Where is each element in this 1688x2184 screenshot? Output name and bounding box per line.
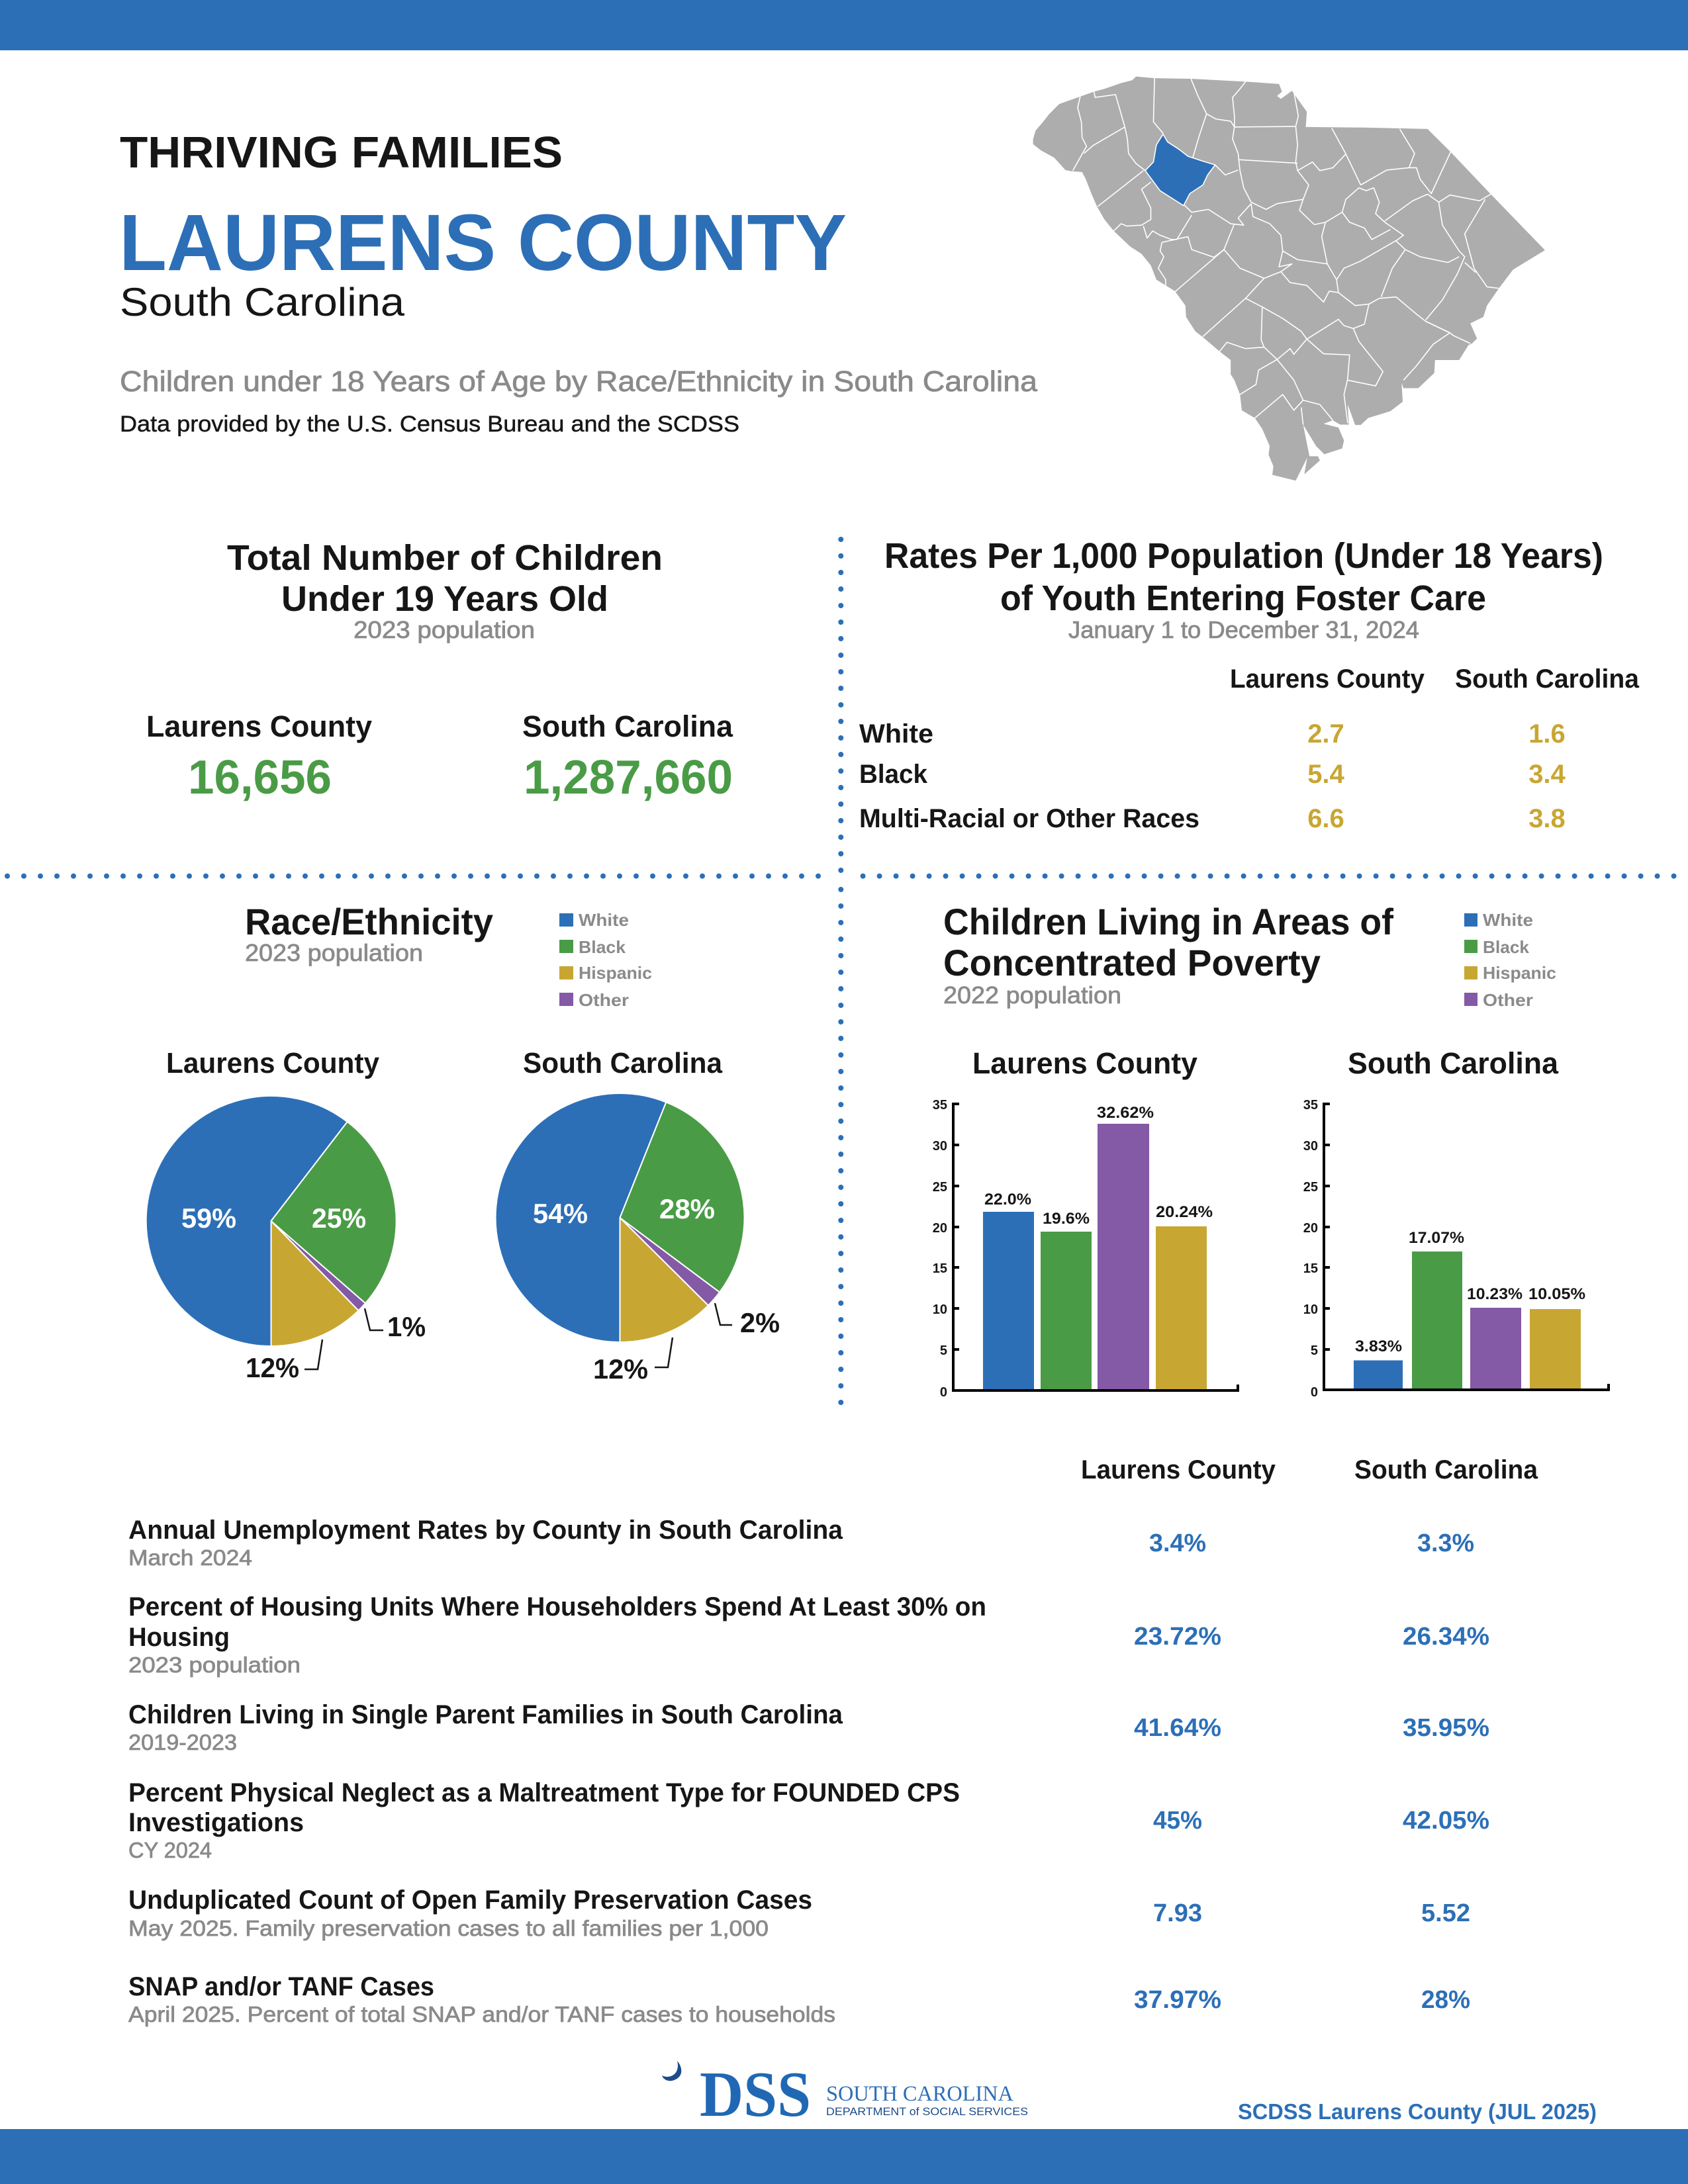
bar chart: South Carolina: 25 [1303, 1180, 1318, 1195]
row: SNAP and TANF [128, 1972, 1470, 2026]
column: Laurens County: Laurens County [1230, 664, 1425, 694]
pie labels: South Carolina: 2% [740, 1307, 780, 1338]
row: single parent families: 41.64% [1134, 1714, 1221, 1742]
values: 6.6 [1307, 804, 1344, 833]
pie chart: South Carolina [496, 1093, 744, 1342]
row: physical neglect [128, 1778, 1489, 1862]
bar chart: Laurens County: 35 [933, 1098, 947, 1113]
bar chart: Laurens County [933, 1098, 1238, 1400]
legend [1464, 910, 1556, 1010]
legend: Other [1483, 990, 1533, 1010]
values: 3.8 [1528, 804, 1566, 833]
row: housing: 2023 population [128, 1653, 301, 1677]
column: South Carolina: South Carolina [1354, 1455, 1538, 1484]
panel: total number of children [146, 538, 733, 804]
heading: Race/Ethnicity [245, 901, 493, 942]
bar chart: South Carolina: 10.05% [1528, 1285, 1585, 1303]
legend: Hispanic [1483, 963, 1556, 983]
subtitle: south carolina: South Carolina [120, 280, 405, 324]
row: unemployment: Annual Unemployment Rates by County in South Carolina [128, 1516, 843, 1545]
heading line 2: of Youth Entering Foster Care [1000, 578, 1486, 618]
bar chart: South Carolina: 10 [1303, 1302, 1318, 1317]
pie labels: South Carolina: 54% [533, 1198, 588, 1229]
bar chart: South Carolina: 35 [1303, 1098, 1318, 1113]
heading line 2: Under 19 Years Old [281, 579, 608, 619]
heading line 2: Concentrated Poverty [943, 942, 1321, 983]
row: SNAP and TANF: SNAP and/or TANF Cases [128, 1972, 434, 2001]
bar chart: Laurens County: 10 [933, 1302, 947, 1317]
bar chart: South Carolina: 10.23% [1467, 1285, 1523, 1303]
heading: Total Number of Children [227, 538, 663, 578]
row: single parent families [128, 1700, 1489, 1754]
row: unemployment: March 2024 [128, 1545, 252, 1570]
heading: Children Living in Areas of [943, 901, 1393, 942]
row: family preservation: 5.52 [1421, 1899, 1470, 1927]
bar chart: South Carolina: 3.83% [1355, 1338, 1402, 1355]
row: physical neglect: 45% [1153, 1807, 1202, 1835]
header block [119, 128, 1038, 437]
bar chart: South Carolina: 5 [1311, 1343, 1318, 1358]
row: unemployment [128, 1516, 1474, 1570]
subheading: 2023 population [353, 616, 535, 643]
row: SNAP and TANF: 37.97% [1134, 1986, 1221, 2014]
description: Children under 18 Years of Age by Race/Ethnicity in South Carolina [120, 365, 1038, 398]
row: family preservation: 7.93 [1153, 1899, 1202, 1927]
title: laurens county: LAURENS COUNTY [119, 197, 847, 287]
bar chart: Laurens County: 19.6% [1043, 1210, 1090, 1228]
column: Laurens County: Laurens County [1081, 1455, 1276, 1484]
pie labels: Laurens County: 59% [181, 1203, 236, 1234]
bar chart: Laurens County: 20.24% [1156, 1203, 1213, 1221]
divider dots [838, 539, 843, 872]
legend: Other [579, 990, 629, 1010]
row: physical neglect: Percent Physical Neglect as a Maltreatment Type for FOUNDED CPS [128, 1778, 960, 1807]
label: South Carolina: South Carolina [522, 709, 733, 743]
value: Laurens County children: 16,656 [188, 751, 332, 804]
value: South Carolina children: 1,287,660 [524, 751, 733, 804]
row: single parent families: 2019-2023 [128, 1730, 237, 1754]
legend [559, 910, 652, 1010]
title: thriving families: THRIVING FAMILIES [120, 128, 563, 177]
data source: Data provided by the U.S. Census Bureau and the SCDSS [120, 412, 739, 437]
map: south carolina counties with Laurens highlighted [1033, 77, 1545, 480]
label: South Carolina: South Carolina [1348, 1046, 1559, 1080]
bar chart: Laurens County: 15 [933, 1261, 947, 1276]
row: single parent families: Children Living in Single Parent Families in South Carolina [128, 1700, 843, 1729]
logo letters: DSS [700, 2059, 811, 2130]
pie labels: Laurens County: 12% [246, 1352, 299, 1383]
panel: foster care rates [859, 536, 1640, 833]
row: housing: Percent of Housing Units Where Householders Spend At Least 30% on [128, 1592, 986, 1621]
values: 1.6 [1528, 719, 1566, 749]
bar chart: Laurens County: 20 [933, 1221, 947, 1236]
bar chart: South Carolina: 30 [1303, 1139, 1318, 1154]
bar chart: Laurens County: 25 [933, 1180, 947, 1195]
pie chart: Laurens County [146, 1096, 397, 1346]
pie labels: South Carolina [533, 1193, 780, 1385]
label: Laurens County: Laurens County [972, 1046, 1197, 1080]
row: physical neglect: 42.05% [1403, 1807, 1489, 1835]
subheading: 2023 population [245, 939, 423, 966]
top banner [0, 0, 1688, 50]
footer credit: SCDSS Laurens County (JUL 2025) [1238, 2099, 1597, 2124]
bar chart: Laurens County: 32.62% [1097, 1104, 1154, 1122]
pie labels: Laurens County: 1% [387, 1311, 426, 1342]
bar chart: South Carolina: 15 [1303, 1261, 1318, 1276]
label: Laurens County: Laurens County [166, 1047, 380, 1079]
row: White: White [859, 719, 933, 749]
bar chart: Laurens County: 5 [940, 1343, 947, 1358]
logo: SC DSS [662, 2059, 1028, 2130]
row: physical neglect: CY 2024 [128, 1838, 212, 1862]
legend: White [579, 910, 629, 930]
row: unemployment: 3.3% [1417, 1529, 1474, 1557]
row: Multi-Racial: Multi-Racial or Other Races [859, 804, 1199, 833]
row: Black: Black [859, 760, 928, 789]
panel: indicators table [128, 1455, 1538, 2026]
pie labels: Laurens County [181, 1203, 426, 1383]
values: 3.4 [1528, 760, 1566, 789]
logo line 1: SOUTH CAROLINA [826, 2082, 1013, 2106]
row: SNAP and TANF: April 2025. Percent of total SNAP and/or TANF cases to households [128, 2002, 835, 2026]
bar chart: Laurens County: 0 [940, 1385, 947, 1400]
row: housing: 26.34% [1403, 1623, 1489, 1651]
bar chart: South Carolina: 0 [1311, 1385, 1318, 1400]
row: family preservation [128, 1886, 1470, 1940]
subheading: January 1 to December 31, 2024 [1068, 616, 1419, 643]
row: physical neglect: Investigations [128, 1808, 304, 1837]
label: South Carolina: South Carolina [523, 1047, 723, 1079]
row: housing [128, 1592, 1489, 1677]
column: South Carolina: South Carolina [1455, 664, 1640, 694]
label: Laurens County: Laurens County [146, 709, 372, 743]
logo line 2: DEPARTMENT of SOCIAL SERVICES [826, 2105, 1028, 2118]
pie labels: Laurens County: 25% [312, 1203, 366, 1234]
row: family preservation: May 2025. Family preservation cases to all families per 1,000 [128, 1916, 769, 1940]
values [1307, 719, 1566, 833]
panel: race/ethnicity [146, 901, 780, 1385]
row: family preservation: Unduplicated Count of Open Family Preservation Cases [128, 1886, 812, 1915]
icon: crescent moon [662, 2061, 681, 2081]
subheading: 2022 population [943, 981, 1121, 1009]
bar chart: Laurens County: 22.0% [984, 1191, 1031, 1208]
panel: concentrated poverty [933, 901, 1609, 1400]
bar chart: Laurens County: 30 [933, 1139, 947, 1154]
row: housing: 23.72% [1134, 1623, 1221, 1651]
pie labels: South Carolina: 28% [659, 1193, 715, 1224]
legend: White [1483, 910, 1533, 930]
row: single parent families: 35.95% [1403, 1714, 1489, 1742]
bar chart: South Carolina [1303, 1098, 1609, 1400]
bar chart: South Carolina: 17.07% [1409, 1229, 1464, 1247]
row: housing: Housing [128, 1623, 230, 1652]
legend: Black [1483, 937, 1530, 957]
legend: Hispanic [579, 963, 652, 983]
row: SNAP and TANF: 28% [1421, 1986, 1470, 2014]
legend: Black [579, 937, 626, 957]
pie labels: South Carolina: 12% [593, 1353, 648, 1385]
values: 5.4 [1307, 760, 1345, 789]
bottom banner [0, 2129, 1688, 2184]
heading: Rates Per 1,000 Population (Under 18 Years) [884, 536, 1603, 576]
bar chart: South Carolina: 20 [1303, 1221, 1318, 1236]
values: 2.7 [1307, 719, 1344, 749]
row: unemployment: 3.4% [1149, 1529, 1206, 1557]
